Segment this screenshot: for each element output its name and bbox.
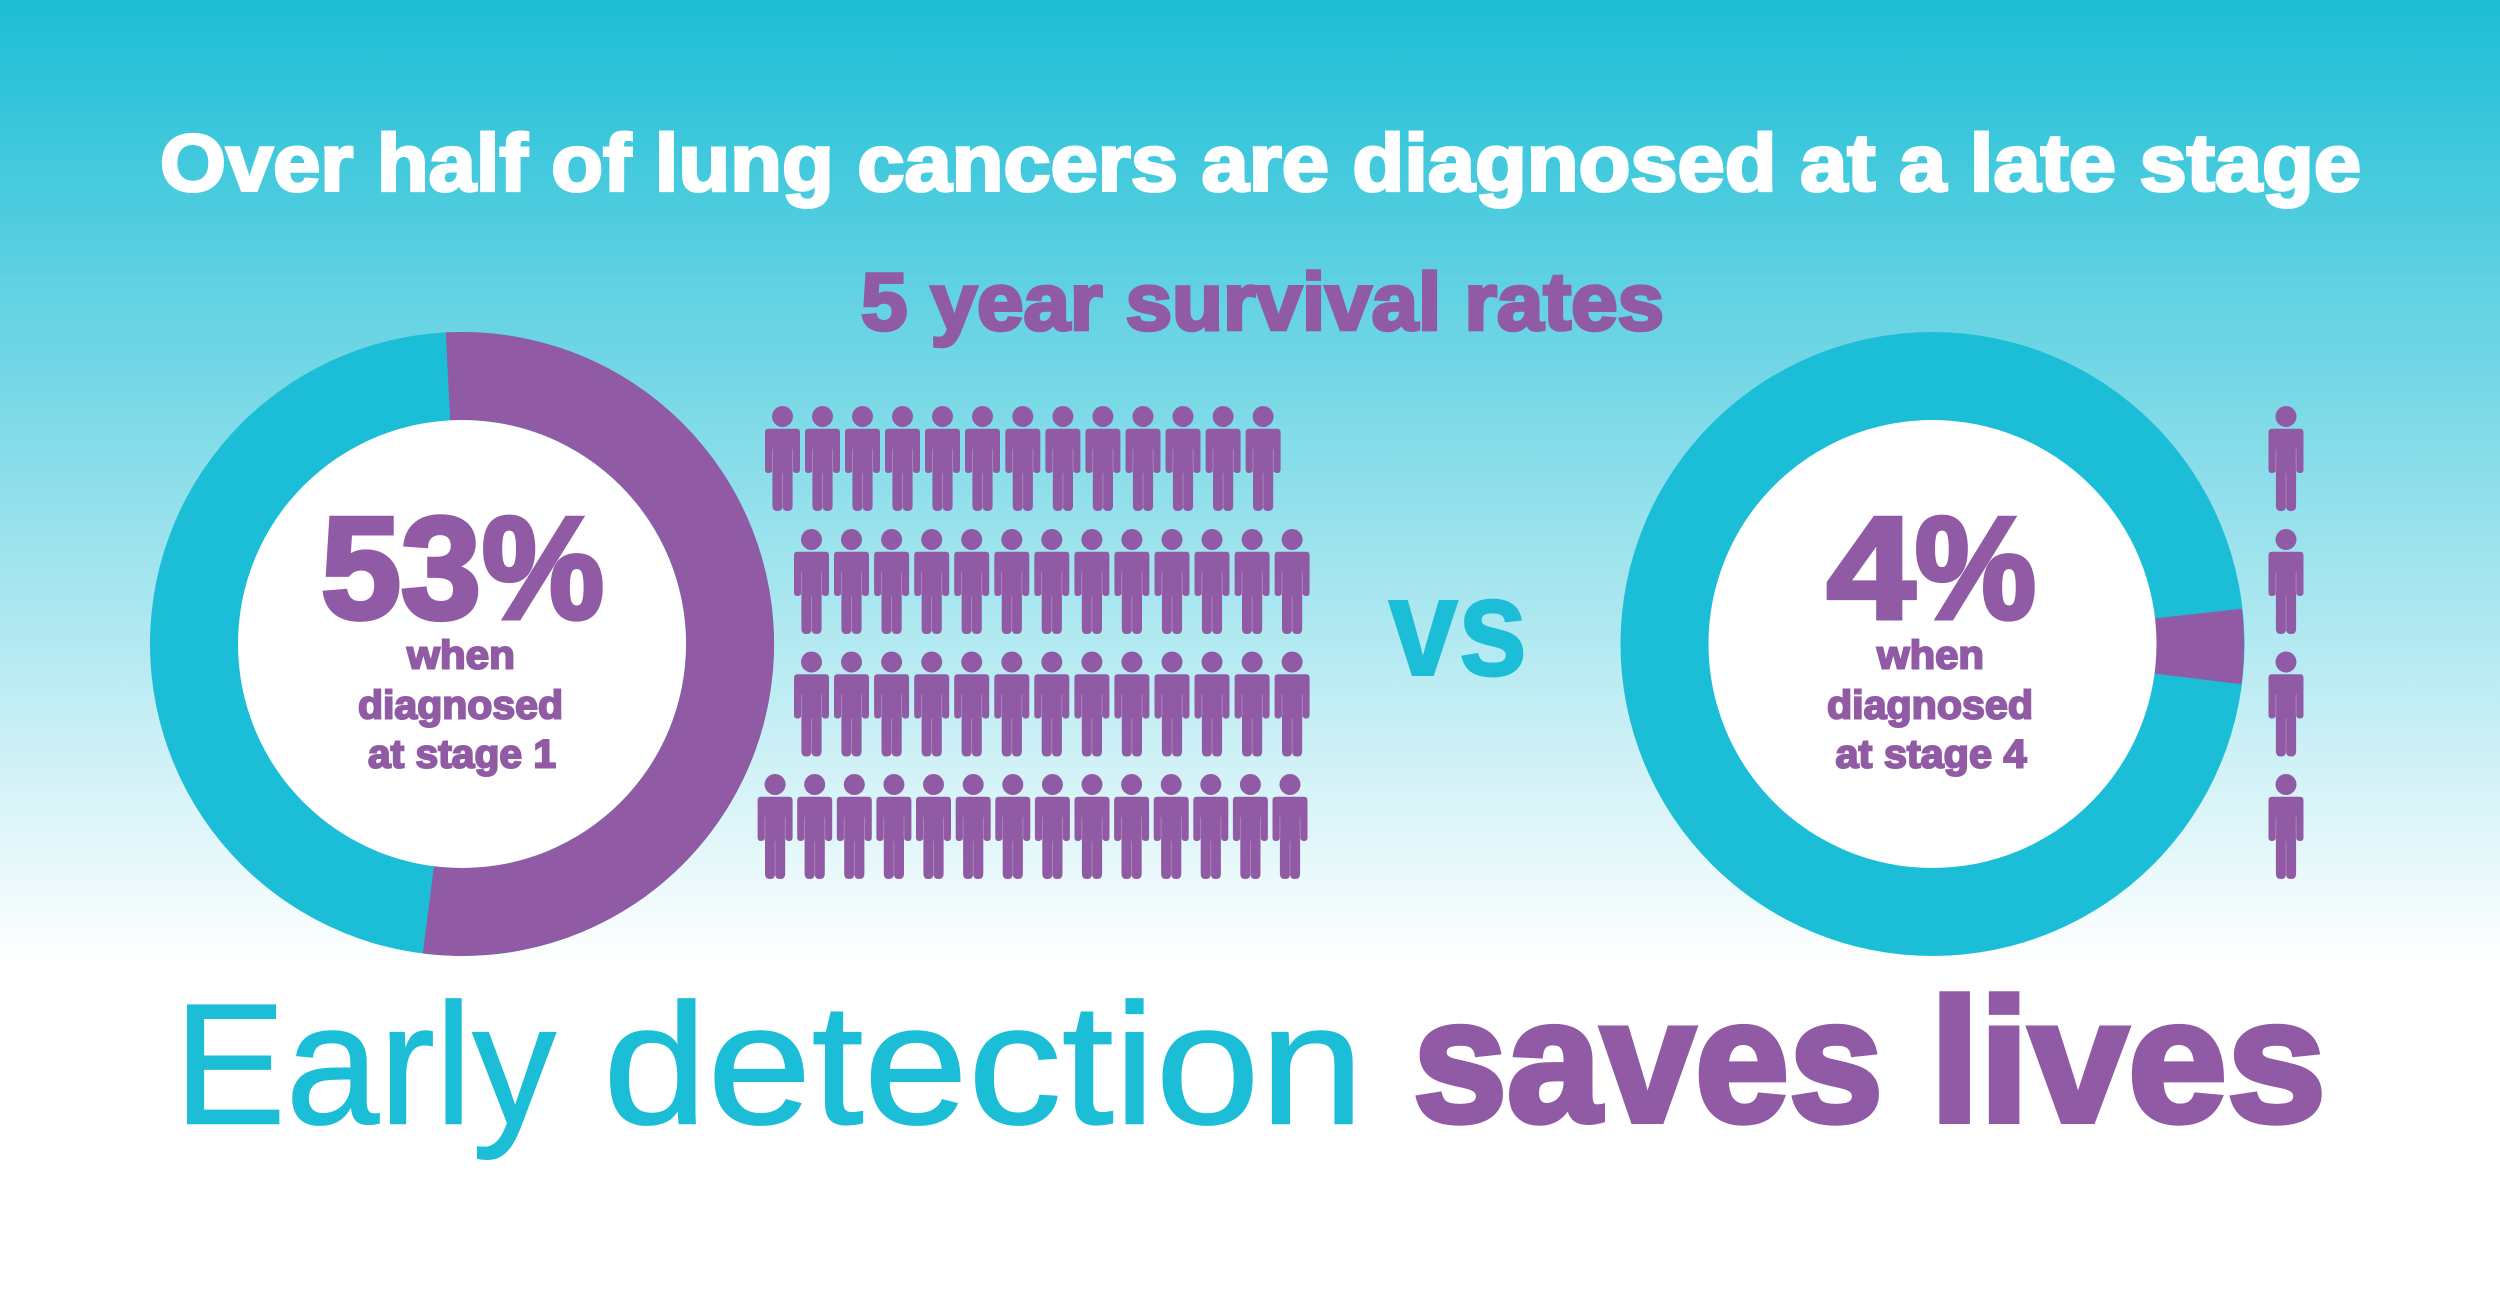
closing line: Early detection bbox=[174, 968, 1364, 1160]
caption: when diagnosed at stage 4 bbox=[1827, 634, 2033, 776]
closing line: saves lives bbox=[1413, 964, 2326, 1159]
closing line: saves lives: saves bbox=[1413, 964, 1883, 1159]
closing line: Early detection: Early bbox=[174, 968, 556, 1160]
caption: when diagnosed at stage 1: at stage 1 bbox=[368, 732, 556, 776]
closing line: Early detection: detection bbox=[603, 968, 1364, 1160]
stat: 53% bbox=[321, 487, 604, 649]
stat: 4%: % bbox=[1915, 487, 2036, 649]
panel: stage 1 donut chart bbox=[150, 332, 774, 956]
stat: 4%: 4 bbox=[1827, 487, 1915, 649]
caption: when diagnosed at stage 4: diagnosed bbox=[1827, 684, 2033, 728]
pictogram: 4 people bbox=[2268, 406, 2304, 879]
title: Over half of lung cancers are diagnosed at a late stage bbox=[160, 118, 2361, 208]
stat: 4% bbox=[1827, 487, 2036, 649]
panel: stage 4 donut chart bbox=[1620, 332, 2244, 956]
stat: 53%: % bbox=[482, 487, 604, 649]
subtitle: 5 year survival rates: 5 year survival rates bbox=[861, 258, 1664, 348]
caption: when diagnosed at stage 1: diagnosed bbox=[358, 684, 563, 728]
closing line: saves lives: lives bbox=[1930, 964, 2326, 1159]
caption: when diagnosed at stage 1 bbox=[358, 634, 563, 776]
caption: when diagnosed at stage 4: when bbox=[1876, 634, 1984, 678]
caption: when diagnosed at stage 4: at stage 4 bbox=[1836, 732, 2027, 776]
background gradient bbox=[0, 0, 2500, 965]
vs label: vs bbox=[1388, 548, 1528, 705]
pictogram: 53 people bbox=[758, 406, 1310, 879]
stat: 53%: 53 bbox=[321, 487, 481, 649]
caption: when diagnosed at stage 1: when bbox=[406, 634, 515, 678]
